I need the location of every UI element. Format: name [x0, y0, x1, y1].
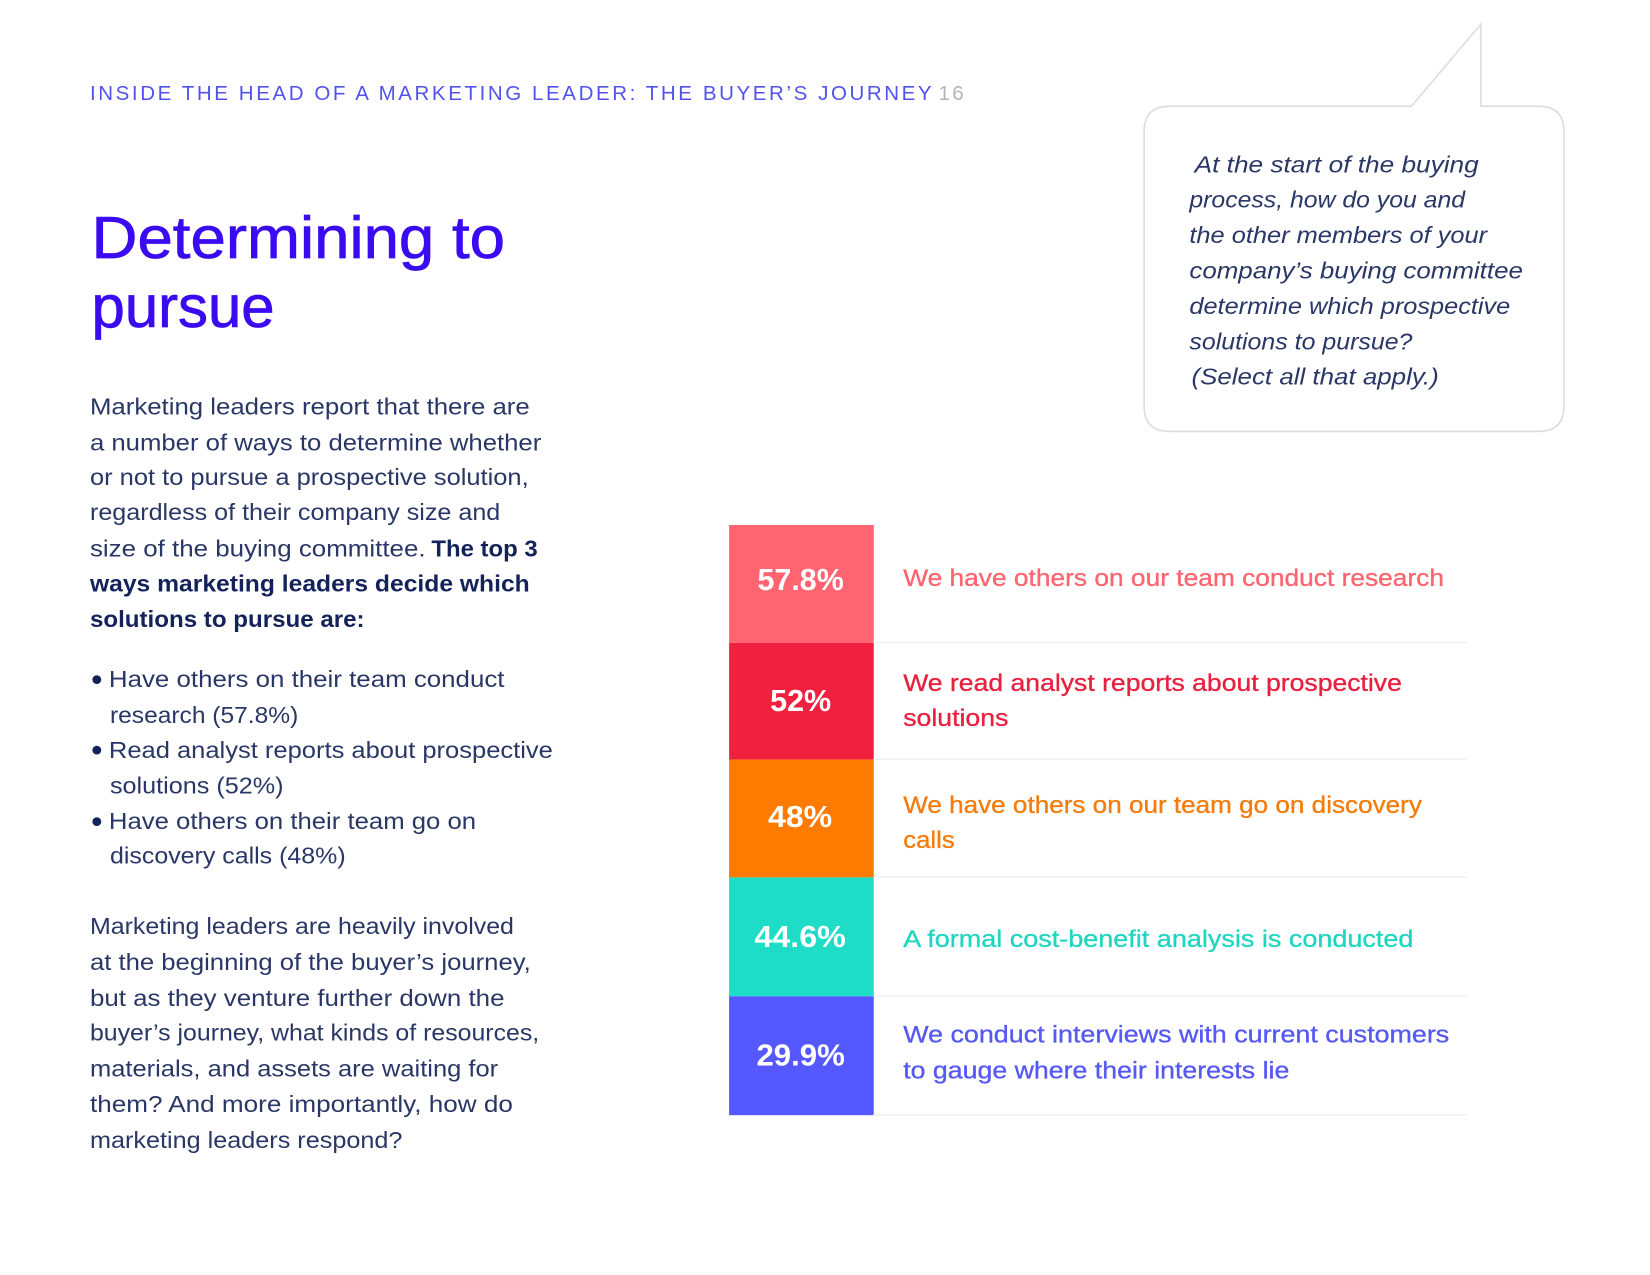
bullet 1: research (57.8%) [110, 702, 298, 728]
closing paragraph: but as they venture further down the [90, 985, 504, 1011]
bullet 3: Have others on their team go on [109, 808, 476, 834]
row 5: 29.9%: to gauge where their interests lie [903, 1058, 1289, 1084]
closing paragraph: materials, and assets are waiting for [90, 1055, 499, 1081]
survey question: determine which prospective [1189, 293, 1510, 319]
intro paragraph: regardless of their company size and [90, 499, 500, 525]
closing paragraph: buyer’s journey, what kinds of resources, [90, 1019, 539, 1045]
intro paragraph: ways marketing leaders decide which [89, 570, 530, 596]
bullet 1 [92, 666, 505, 728]
intro paragraph: or not to pursue a prospective solution, [90, 464, 529, 490]
speech bubble callout [1144, 24, 1564, 431]
row 1: 57.8% [729, 525, 1467, 643]
title: Determining to [92, 206, 505, 271]
row 1: 57.8%: We have others on our team conduct research [903, 566, 1444, 592]
survey question: (Select all that apply.) [1191, 364, 1439, 390]
intro paragraph: solutions to pursue are: [90, 606, 365, 632]
closing paragraph: marketing leaders respond? [90, 1127, 402, 1153]
bullet 3 [92, 808, 476, 869]
bullet 2: Read analyst reports about prospective [109, 737, 553, 763]
bullet 3: discovery calls (48%) [110, 843, 346, 869]
bullet 2: solutions (52%) [110, 772, 284, 798]
intro paragraph: The top 3 [431, 536, 538, 562]
intro paragraph: Marketing leaders report that there are [90, 394, 530, 420]
intro paragraph: a number of ways to determine whether [90, 429, 542, 455]
closing paragraph: them? And more importantly, how do [90, 1091, 513, 1117]
survey question: company’s buying committee [1189, 257, 1523, 283]
row 5: 29.9% [729, 996, 1467, 1116]
title [92, 206, 505, 340]
results chart [729, 525, 1467, 1116]
survey question: solutions to pursue? [1189, 328, 1413, 354]
row 5: 29.9%: We conduct interviews with current customers [903, 1023, 1449, 1049]
row 3: 48%: 48% [768, 800, 832, 834]
intro paragraph [89, 394, 542, 632]
row 1: 57.8%: 57.8% [758, 563, 844, 597]
title: pursue [92, 275, 275, 340]
survey question: the other members of your [1189, 222, 1489, 248]
survey question: At the start of the buying [1192, 152, 1479, 178]
page number: 16 [938, 82, 964, 105]
row 3: 48% [729, 760, 1467, 878]
row 4: 44.6% [729, 877, 1467, 997]
intro paragraph: size of the buying committee. [90, 536, 426, 562]
row 4: 44.6%: A formal cost-benefit analysis is conducted [903, 927, 1413, 953]
closing paragraph: at the beginning of the buyer’s journey, [90, 949, 531, 975]
bullet 1: Have others on their team conduct [109, 666, 505, 692]
row 2: 52%: We read analyst reports about prospective [903, 671, 1402, 697]
bullet list [92, 666, 553, 869]
row 3: 48%: calls [903, 828, 955, 854]
survey question: process, how do you and [1188, 186, 1466, 212]
row 5: 29.9%: 29.9% [756, 1039, 845, 1073]
row 2: 52% [729, 643, 1467, 760]
row 4: 44.6%: 44.6% [754, 920, 846, 954]
row 2: 52%: solutions [903, 706, 1008, 732]
closing paragraph: Marketing leaders are heavily involved [90, 913, 514, 939]
row 2: 52%: 52% [770, 684, 831, 718]
row 3: 48%: We have others on our team go on discovery [903, 793, 1422, 819]
running header: INSIDE THE HEAD OF A MARKETING LEADER: THE BUYER’S JOURNEY [90, 82, 932, 105]
bullet 2 [92, 737, 553, 798]
closing paragraph [90, 913, 539, 1153]
survey question [1188, 152, 1523, 390]
